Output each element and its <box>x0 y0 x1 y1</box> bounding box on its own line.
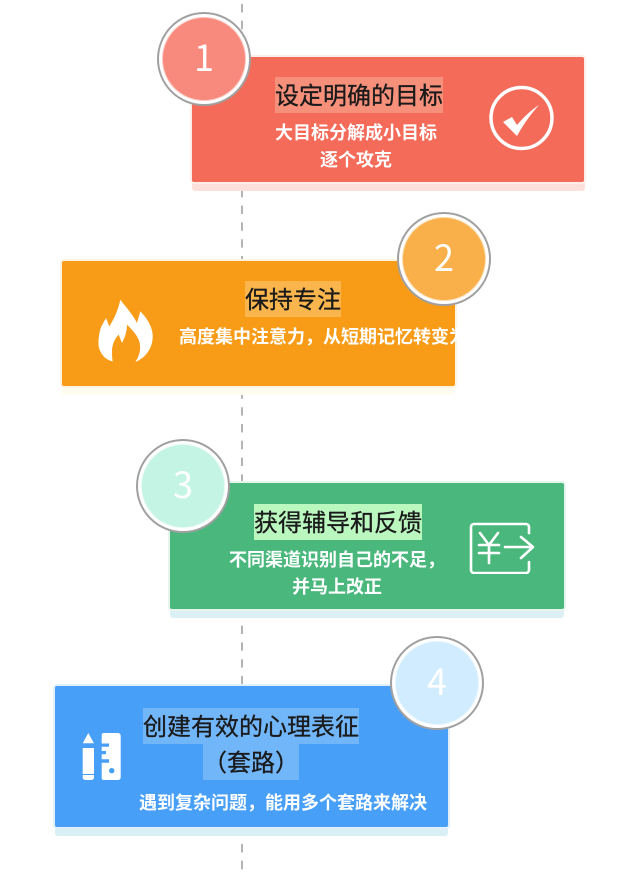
heading 4 line 2: （套路） <box>203 750 299 777</box>
card body 3 <box>168 481 566 611</box>
icon: yen transfer <box>470 522 534 574</box>
heading 4 <box>143 708 359 780</box>
card body 2 <box>60 259 457 388</box>
panel: step 4 mental representations <box>53 636 484 836</box>
number badge 3 <box>136 439 230 533</box>
panel: step 2 focus <box>60 212 539 395</box>
number badge 1 <box>157 12 251 106</box>
card shadow 2 <box>62 375 455 395</box>
text 3: 不同渠道识别自己的不足， <box>229 550 445 570</box>
timeline: dashed vertical line <box>241 4 243 870</box>
card shadow 4 <box>55 815 448 836</box>
text 1: 大目标分解成小目标 <box>275 123 437 143</box>
text 4: 遇到复杂问题，能用多个套路来解决 <box>139 793 427 813</box>
text 3: 并马上改正 <box>292 577 382 597</box>
heading 4 line 1: 创建有效的心理表征 <box>143 714 359 741</box>
card body 4 <box>53 684 450 829</box>
panel: step 1 goal setting <box>157 12 586 191</box>
icon: check mark <box>489 86 554 150</box>
number badge 3: 3 <box>173 457 193 509</box>
number badge 4: 4 <box>427 654 447 706</box>
text 1 <box>275 123 437 170</box>
heading 2: 保持专注 <box>245 287 341 314</box>
text 1: 逐个攻克 <box>320 150 392 170</box>
panel: step 3 coaching and feedback <box>136 439 566 618</box>
card body 1 <box>190 55 586 184</box>
card shadow 1 <box>192 170 585 191</box>
icon: flame <box>98 300 153 362</box>
text 3 <box>229 550 445 597</box>
icon: pencil and ruler <box>82 733 121 780</box>
number badge 4 <box>390 636 484 730</box>
number badge 1: 1 <box>194 30 214 82</box>
text 2: 高度集中注意力，从短期记忆转变为长时记忆 <box>179 327 539 347</box>
number badge 2: 2 <box>434 230 454 282</box>
number badge 2 <box>397 212 491 306</box>
card shadow 3 <box>170 595 564 618</box>
heading 1: 设定明确的目标 <box>275 83 443 110</box>
heading 3: 获得辅导和反馈 <box>254 510 422 537</box>
